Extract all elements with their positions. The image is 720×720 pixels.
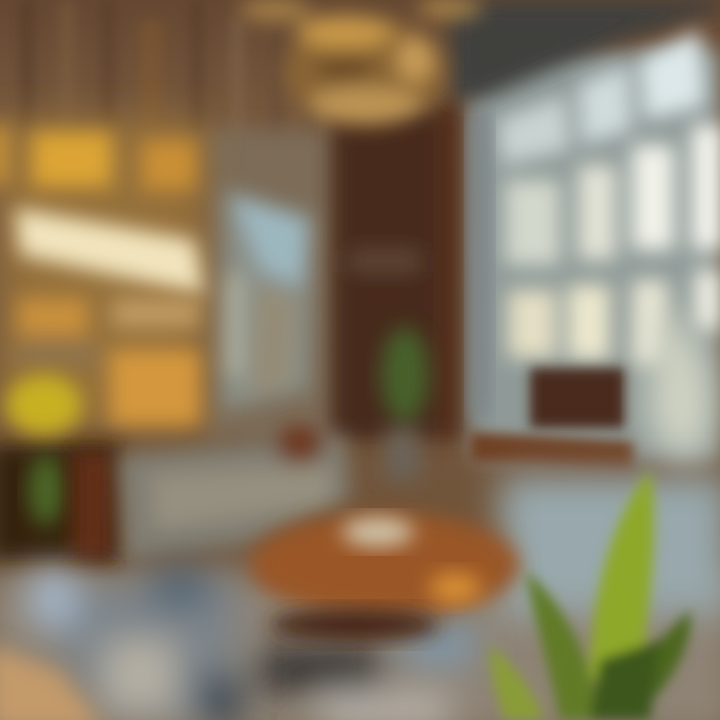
window left edge (470, 110, 490, 420)
snake plant (490, 470, 690, 720)
book on table (342, 517, 414, 547)
dark left furniture (0, 445, 120, 560)
painting (222, 190, 312, 410)
window glow (0, 120, 205, 430)
panel: dark wood column (332, 100, 467, 440)
panel: right window (450, 0, 720, 460)
red wooden cabinet (72, 450, 114, 560)
right lower blue area (500, 475, 720, 615)
sofa (118, 425, 350, 560)
floor bottom left (0, 645, 105, 720)
table top (250, 513, 520, 617)
table highlight (429, 572, 481, 604)
panel: centre wall (205, 130, 335, 440)
centre plant (381, 327, 429, 480)
window base (470, 50, 720, 460)
round wooden table (250, 513, 520, 641)
lower panes (15, 298, 200, 425)
rug (20, 570, 475, 720)
upper panes (0, 125, 196, 190)
yellow left plant (6, 375, 82, 435)
table shadow (270, 609, 440, 641)
window panes (498, 30, 720, 365)
panel: yellow left window (0, 120, 205, 430)
white flower (648, 305, 714, 470)
window top dark frame (450, 0, 720, 100)
green left plant (28, 454, 64, 526)
wood wall stripes (20, 0, 317, 420)
monitor on desk (530, 368, 625, 428)
bright band (15, 208, 205, 295)
lower floor band (0, 570, 720, 720)
chandelier (239, 0, 482, 126)
desk (470, 432, 635, 472)
